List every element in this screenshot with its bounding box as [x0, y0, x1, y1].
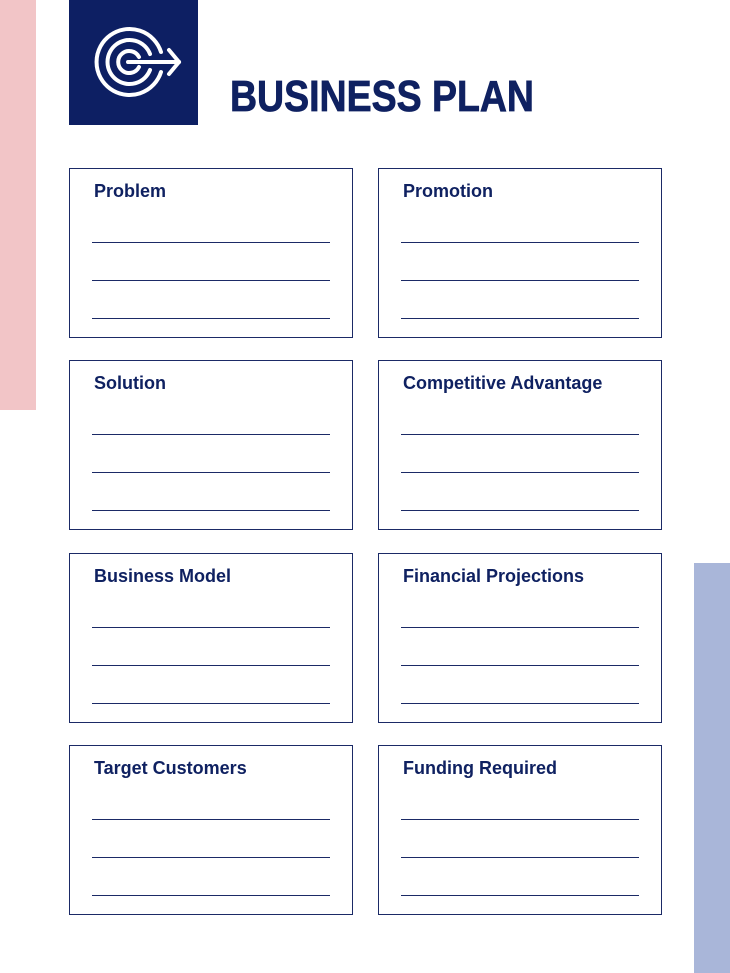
- panel: Target Customers: [69, 745, 353, 915]
- panel: Funding Required: Funding Required: [403, 758, 557, 778]
- panel: Promotion: Promotion: [403, 181, 493, 201]
- panel: Business Model: [69, 553, 353, 723]
- panel: Promotion: [378, 168, 662, 338]
- icon: target logo: [69, 0, 198, 125]
- panel: Target Customers: Target Customers: [94, 758, 247, 778]
- panel: Business Model: Business Model: [94, 566, 231, 586]
- panel: Problem: Problem: [94, 181, 166, 201]
- panel: Financial Projections: Financial Projections: [403, 566, 584, 586]
- panel: Solution: Solution: [94, 373, 166, 393]
- panel: Financial Projections: [378, 553, 662, 723]
- blue side bar: [694, 563, 730, 973]
- panel: Competitive Advantage: Competitive Advantage: [403, 373, 602, 393]
- panel: Problem: [69, 168, 353, 338]
- panel: Funding Required: [378, 745, 662, 915]
- panel: Competitive Advantage: [378, 360, 662, 530]
- pink side bar: [0, 0, 36, 410]
- panel: Solution: [69, 360, 353, 530]
